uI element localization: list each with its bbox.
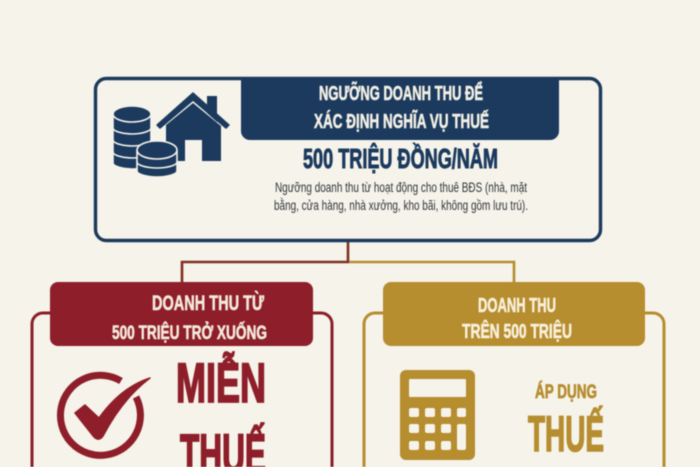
heading banner: NGƯỠNG DOANH THU ĐỂ (319, 81, 483, 105)
heading banner: gold (383, 282, 645, 346)
description (274, 180, 528, 213)
exempt label (176, 351, 266, 467)
exempt label: MIỄN (176, 351, 266, 414)
description: bằng, cửa hàng, nhà xưởng, kho bãi, không gồm lưu trú). (274, 198, 528, 213)
tax label: THUẾ (528, 406, 604, 462)
panel: above 500 million (364, 282, 664, 467)
icon: calculator (400, 370, 475, 460)
heading banner: red (50, 282, 313, 346)
connector: top box to gold branch (349, 262, 514, 284)
tax label: ÁP DỤNG (535, 381, 597, 403)
tax label (528, 381, 604, 462)
icon: check mark (60, 375, 150, 455)
heading banner: red: 500 TRIỆU TRỞ XUỐNG (112, 320, 267, 344)
heading banner: XÁC ĐỊNH NGHĨA VỤ THUẾ (314, 110, 489, 133)
icon: coins and house (113, 93, 229, 177)
icon: house (157, 93, 229, 161)
threshold value: 500 TRIỆU ĐỒNG/NĂM (303, 143, 498, 174)
icon: right coin stack (137, 141, 177, 177)
heading banner (241, 78, 559, 140)
panel: up to 500 million (32, 282, 332, 467)
panel: revenue threshold (96, 78, 600, 240)
description: Ngưỡng doanh thu từ hoạt động cho thuê BĐS (nhà, mặt (275, 180, 527, 195)
heading banner: red: DOANH THU TỪ (152, 291, 264, 315)
icon: left coin stack (113, 106, 151, 169)
connector: top box to red branch (182, 240, 348, 284)
heading banner: gold: TRÊN 500 TRIỆU (462, 319, 572, 343)
heading banner: gold: DOANH THU (478, 295, 556, 317)
